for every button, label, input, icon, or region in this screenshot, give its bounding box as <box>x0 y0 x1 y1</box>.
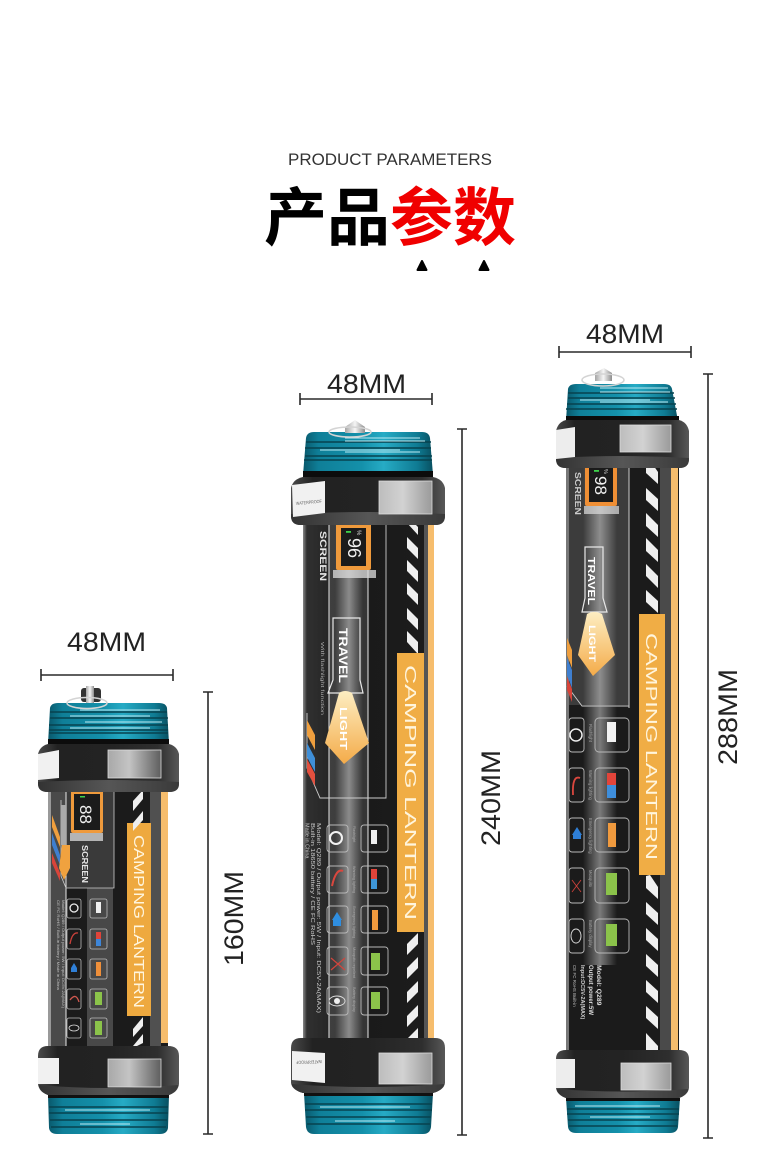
travel flashlight outline: TRAVEL <box>585 557 597 606</box>
battery screen: 98 <box>591 476 610 495</box>
bottom collar <box>291 1038 445 1093</box>
lantern: medium 240mm <box>291 420 445 1134</box>
dimension: large lantern height <box>703 374 743 1138</box>
camping lantern label: CAMPING LANTERN <box>401 665 418 920</box>
function captions: Battery display <box>588 920 593 948</box>
travel flashlight outline <box>328 618 363 693</box>
top collar <box>38 744 179 792</box>
dimension: medium lantern height <box>457 429 506 1135</box>
function icons <box>67 899 107 1038</box>
battery screen <box>70 790 103 841</box>
dimension: small lantern height <box>203 692 249 1134</box>
specification text: CE FC RoHS Built-in <box>572 965 577 1007</box>
dimension: large lantern width: 48MM <box>586 319 664 349</box>
battery screen: 96 <box>344 538 364 558</box>
specification text: Built-in 18650 battery / CE FC RoHS <box>309 823 315 945</box>
specification text: Model: Q289 / Output power: 5W / Input: DC5V-2A(MAX) <box>315 823 321 1013</box>
function captions: Mosquito <box>588 870 593 888</box>
camping lantern label: CAMPING LANTERN <box>130 835 147 1008</box>
hook ring <box>582 368 624 386</box>
battery screen: % <box>602 469 608 474</box>
travel light beam <box>578 612 615 676</box>
function captions: Flashlight <box>588 724 593 743</box>
function icons <box>327 825 388 1015</box>
hazard stripes <box>407 523 418 1041</box>
icon glyph fills <box>572 722 617 946</box>
hazard stripes <box>646 462 658 1053</box>
dimension: small lantern height: 160MM <box>219 871 249 966</box>
function captions: Emergency lighting <box>588 818 593 854</box>
title: 产品参数 <box>264 168 516 259</box>
dimension: small lantern width <box>41 627 173 681</box>
specification text: Input:DC5V-2A(MAX) <box>579 965 585 1020</box>
screen label: SCREEN <box>573 472 583 515</box>
lantern: large 288mm <box>556 368 689 1133</box>
outline panel <box>307 522 386 798</box>
function captions: Mosquito repellent <box>352 947 356 979</box>
specification text: CE FC RoHS / Built-in battery / Made in China <box>56 900 61 991</box>
dimension: medium lantern width <box>300 369 432 405</box>
lantern body <box>566 465 679 1053</box>
dimension: small lantern width: 48MM <box>67 627 146 657</box>
outline panel <box>61 790 114 888</box>
colour stripes <box>567 638 572 702</box>
bottom thread <box>566 1098 680 1133</box>
top thread <box>566 384 679 422</box>
lantern body <box>303 522 434 1040</box>
top thread <box>48 703 169 745</box>
triangle markers <box>418 261 488 270</box>
lantern body <box>48 788 168 1048</box>
top collar <box>556 420 689 468</box>
hook ring <box>67 686 107 708</box>
specification text <box>572 965 602 1020</box>
top collar <box>291 477 445 525</box>
camping lantern label <box>639 614 665 875</box>
travel light beam: LIGHT <box>337 707 348 750</box>
travel light beam <box>325 691 369 764</box>
camping lantern label <box>127 823 151 1016</box>
battery screen: 88 <box>76 805 95 824</box>
screen label: SCREEN <box>318 531 328 581</box>
bottom thread <box>48 1095 169 1134</box>
top collar: WATERPROOF <box>296 499 322 506</box>
hook ring <box>329 420 371 437</box>
bottom collar <box>556 1050 689 1098</box>
bottom collar: WATERPROOF <box>296 1059 322 1065</box>
outline panel <box>567 465 629 706</box>
function icons <box>569 718 629 953</box>
camping lantern label: CAMPING LANTERN <box>642 633 659 860</box>
specification text: Model: Q289 <box>595 965 602 1006</box>
specification text: Model: Q289 / Output power: 5W / Input: DC5V-2A(MAX) <box>61 900 66 1009</box>
function captions <box>588 724 593 948</box>
travel light beam: LIGHT <box>586 625 597 662</box>
specification text <box>304 823 321 1013</box>
function captions: Warning lighting <box>588 770 593 801</box>
travel flashlight outline <box>582 547 607 612</box>
battery screen: % <box>355 530 361 536</box>
icon glyph fills <box>332 830 380 1009</box>
function captions: Emergency lighting <box>352 906 356 938</box>
bottom collar <box>38 1046 179 1095</box>
battery screen <box>584 463 619 514</box>
function captions: Warning lighting <box>352 866 356 893</box>
top thread <box>303 432 433 478</box>
travel light mark <box>59 805 70 880</box>
screen label: SCREEN <box>80 845 90 883</box>
camping lantern label <box>397 653 424 932</box>
bottom thread <box>304 1093 433 1134</box>
function captions: Flashlight <box>352 826 356 843</box>
battery screen <box>333 523 376 578</box>
dimension: large lantern width <box>559 319 691 358</box>
dimension: large lantern height: 288MM <box>713 669 743 765</box>
colour stripes <box>307 720 315 786</box>
lantern: small 160mm <box>38 686 179 1134</box>
travel flashlight outline: TRAVEL <box>336 628 348 683</box>
dimension: medium lantern height: 240MM <box>476 750 506 846</box>
dimension: medium lantern width: 48MM <box>327 369 406 399</box>
colour stripes <box>52 815 60 881</box>
specification text: Made in China <box>304 823 310 859</box>
subtitle: PRODUCT PARAMETERS <box>288 150 492 169</box>
function captions: Battery display <box>352 987 356 1012</box>
specification text <box>56 900 66 1009</box>
icon glyph fills <box>71 902 102 1035</box>
flashlight note: With flashlight function <box>320 642 325 716</box>
specification text: Output power:5W <box>587 965 593 1015</box>
function captions <box>352 826 356 1012</box>
hazard stripes <box>133 790 143 1048</box>
